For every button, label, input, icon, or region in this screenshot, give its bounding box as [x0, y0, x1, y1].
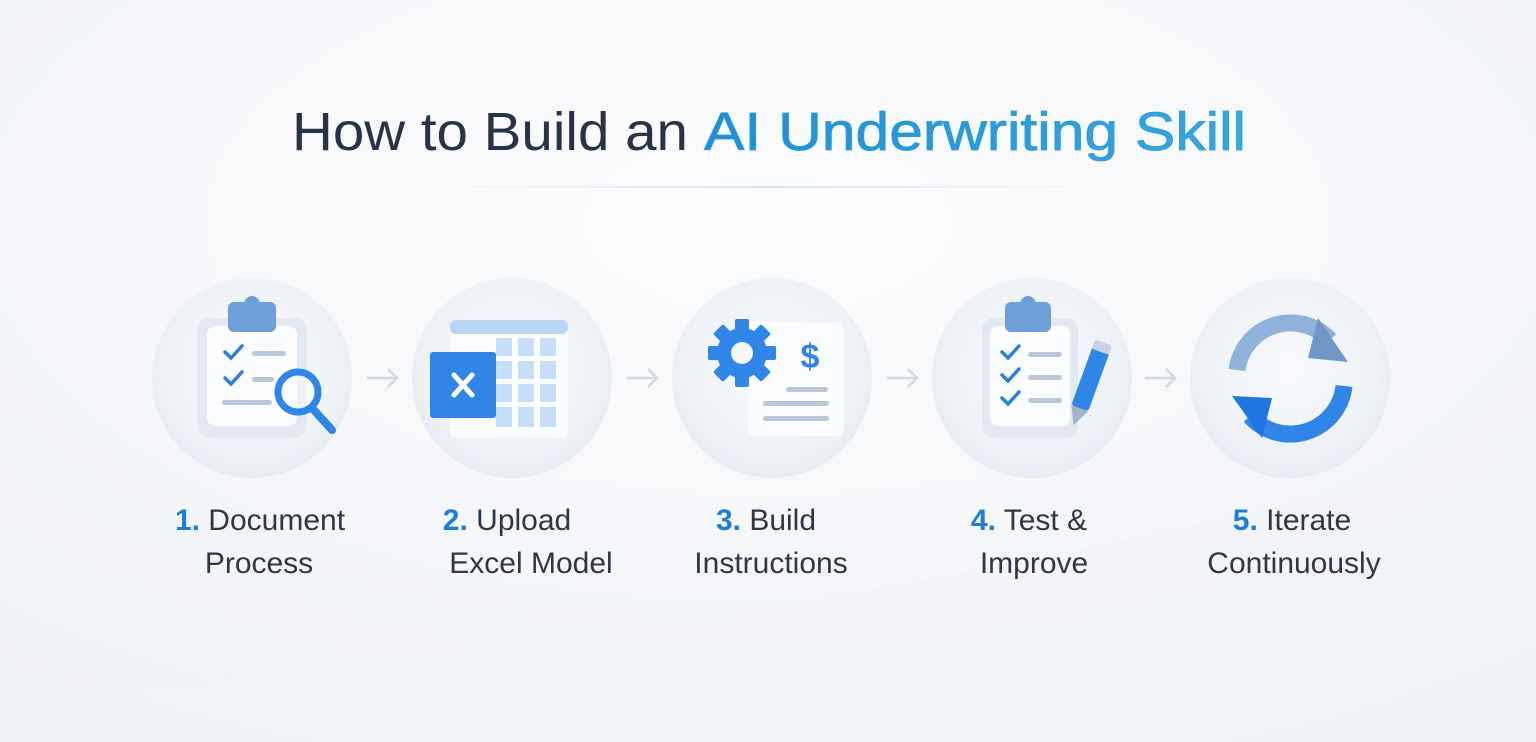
label 1: 1. Document	[175, 504, 346, 537]
title: How to Build an	[292, 102, 688, 162]
label 3: Instructions	[694, 547, 848, 580]
step 3 icon: gear and document: $	[801, 338, 820, 376]
label 2: 2. Upload	[443, 504, 571, 537]
label 3	[694, 504, 848, 580]
arrow 2	[627, 369, 657, 387]
label 2: Excel Model	[449, 547, 613, 580]
label 4	[971, 504, 1088, 580]
arrow 3	[887, 369, 917, 387]
arrow 4	[1145, 369, 1175, 387]
title: AI Underwriting Skill	[704, 102, 1246, 162]
label 5: 5. Iterate	[1233, 504, 1351, 537]
title	[292, 102, 1246, 162]
label 1	[175, 504, 346, 580]
label 2	[443, 504, 613, 580]
step 2 icon: spreadsheet	[412, 278, 612, 478]
step 4 icon: checklist with pencil	[932, 278, 1132, 478]
step 5 icon: refresh arrows	[1190, 278, 1390, 478]
label 5: Continuously	[1207, 547, 1381, 580]
label 3: 3. Build	[716, 504, 816, 537]
step 3 icon: gear and document	[672, 278, 872, 478]
label 1: Process	[205, 547, 313, 580]
label 5	[1207, 504, 1381, 580]
label 4: 4. Test &	[971, 504, 1087, 537]
step 1 icon: clipboard with magnifier	[152, 278, 352, 478]
label 4: Improve	[980, 547, 1088, 580]
arrow 1	[367, 369, 397, 387]
